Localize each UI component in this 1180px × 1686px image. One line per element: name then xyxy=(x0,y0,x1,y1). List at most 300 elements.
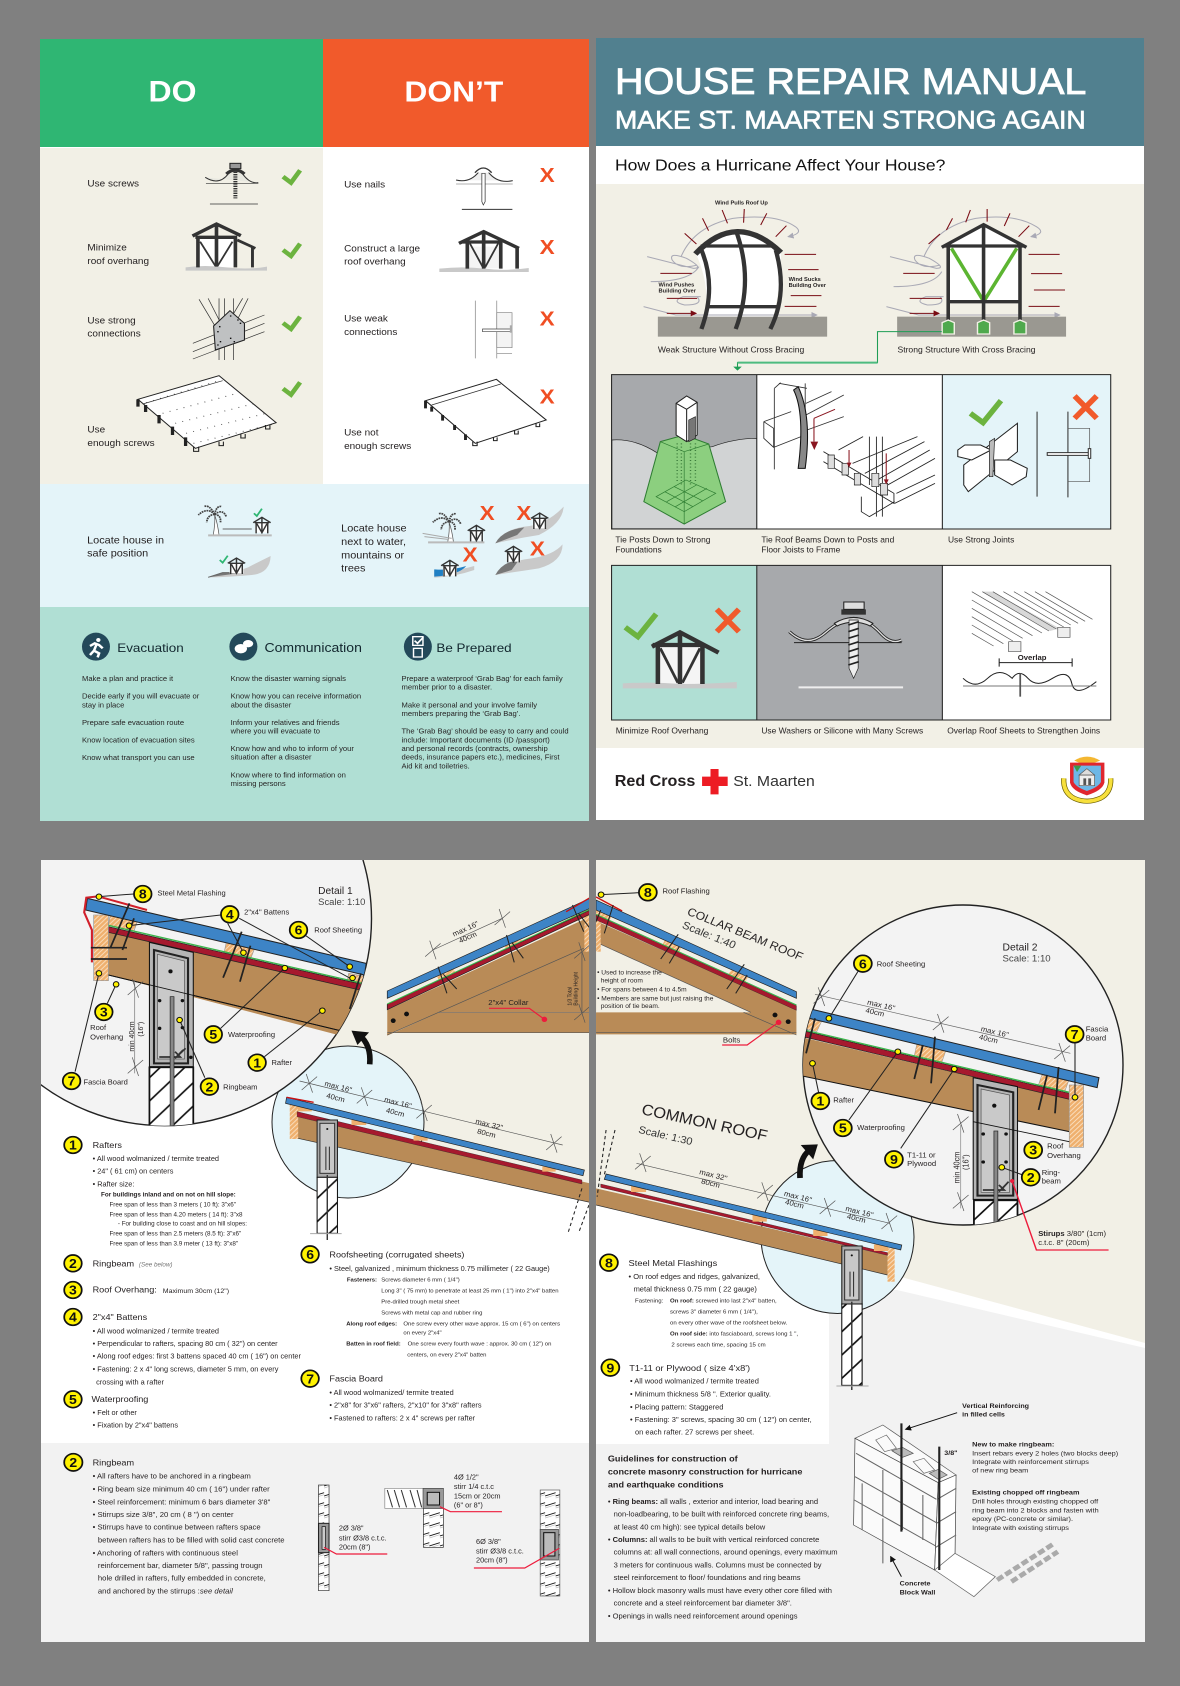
diagram: collar beam roof, left half xyxy=(387,898,591,1036)
icon: house on hill edge, unsafe: X xyxy=(530,537,545,560)
ringbeam text: between rafters has to be filled with solid cast concrete xyxy=(98,1536,285,1545)
detail 1 callouts: 2"x4" Battens xyxy=(244,908,290,917)
text: safe position xyxy=(87,536,164,560)
item 4 battens: • Along roof edges: first 3 battens spaced 40 cm ( 16") on center xyxy=(93,1353,302,1361)
item 7 fascia board: • Fastened to rafters: 2 x 4" screws per rafter xyxy=(329,1414,476,1422)
wall section B: 4Ø 1/2" xyxy=(454,1473,479,1481)
text: unsafe position: mountains or xyxy=(341,551,405,561)
labels: wall: 3/8" xyxy=(944,1450,958,1457)
text: existing ringbeam: Drill holes through existing chopped off xyxy=(972,1498,1098,1506)
list: communication: Know where to find information on xyxy=(231,771,346,779)
item 2 ringbeam: 2 xyxy=(69,1256,77,1271)
list: be prepared: Prepare a waterproof ‘Grab Bag’ for each family xyxy=(402,674,563,683)
do labels: Use strong xyxy=(87,316,136,326)
arrow: footing to detail xyxy=(733,332,942,371)
list: communication: missing persons xyxy=(231,779,286,788)
item 4 battens: • All wood wolmanized / termite treated xyxy=(93,1327,219,1335)
item 1 rafters: 1 xyxy=(69,1138,77,1153)
item 6 roofsheeting: Long 3" ( 75 mm) to penetrate at least 25 mm ( 1") into 2"x4" batten xyxy=(381,1288,559,1294)
captions: row one: Floor Joists to Frame xyxy=(761,546,841,555)
item 7 fascia board: • All wood wolmanized/ termite treated xyxy=(329,1389,454,1397)
ringbeam text xyxy=(64,1454,285,1595)
diagram: collar beam roof, right half xyxy=(596,884,796,1045)
detail 1 callouts: Roof Sheeting xyxy=(314,926,362,934)
heading: be prepared: Be Prepared xyxy=(436,641,512,655)
inset: common roof circle xyxy=(272,1046,424,1198)
diagram: common roof, left half: max 32" xyxy=(474,1117,504,1132)
diagram: common roof, right half: 80cm xyxy=(700,1177,721,1190)
item 8 steel metal flashings: metal thickness 0.75 mm ( 22 gauge) xyxy=(634,1285,757,1294)
item 1 rafters: For buildings inland and on not on hill slope: xyxy=(101,1191,236,1198)
do labels: Use xyxy=(87,425,105,436)
detail 2 callouts: c.t.c. 8" (20cm) xyxy=(1038,1238,1089,1247)
icons: green checks xyxy=(283,170,300,395)
detail 2 callouts: Rafter xyxy=(833,1096,855,1104)
captions: row one xyxy=(615,536,1014,555)
ringbeam text: • All rafters have to be anchored in a ringbeam xyxy=(93,1472,251,1481)
item 1 rafters: Free span of less than 3 meters ( 10 ft): 3"x6" xyxy=(109,1201,236,1208)
label: vertical reinforcing: Vertical Reinforcing xyxy=(962,1403,1029,1410)
panel: detail page left xyxy=(41,860,589,1642)
wall section C xyxy=(474,1490,560,1596)
item 4 battens: • Perpendicular to rafters, spacing 80 cm ( 32") on center xyxy=(93,1340,278,1348)
item 5 waterproofing: 5 xyxy=(69,1392,77,1407)
captions: row one: Tie Roof Beams Down to Posts and xyxy=(761,536,895,545)
do labels: roof overhang xyxy=(87,256,149,267)
item 2 ringbeam: Ringbeam xyxy=(93,1259,134,1269)
detail 1 callouts: min 40cm xyxy=(128,1021,136,1052)
list: be prepared: Aid kit and toiletries. xyxy=(402,762,470,770)
hurricane diagrams xyxy=(644,200,1066,371)
item 1 rafters: Free span of less than 2.5 meters (8.5 ft): 3"x6" xyxy=(109,1231,241,1238)
detail 2 callouts: 9 xyxy=(890,1151,898,1167)
beige background xyxy=(327,860,589,1183)
detail 1 callouts: Detail 1 xyxy=(318,886,353,897)
detail 1 callouts: Fascia Board xyxy=(83,1078,128,1086)
labels: wall: Concrete xyxy=(900,1581,931,1588)
don't labels: connections xyxy=(344,327,398,338)
guidelines list: steel reinforcement to floor/ foundations and ring beams xyxy=(614,1573,801,1582)
wall section B: stirr 1/4 c.t.c xyxy=(454,1483,494,1491)
icon: communication bubbles xyxy=(229,633,257,661)
item 2 ringbeam xyxy=(64,1255,173,1272)
label: vertical reinforcing: in filled cells xyxy=(962,1412,1005,1419)
diagram: common roof, right half: max 32" xyxy=(698,1167,729,1183)
guidelines list: columns at: all wall connections, around openings, every maximum xyxy=(614,1548,838,1557)
item 6 roofsheeting: One screw every other wave approx. 15 cm ( 6") on centers xyxy=(403,1321,560,1327)
item 6 roofsheeting: One screw every fourth wave : approx. 30 cm ( 12") on xyxy=(408,1341,551,1347)
detail grid xyxy=(612,375,1111,801)
item 8 steel metal flashings: 2 screws each time, spacing 15 cm xyxy=(671,1343,766,1349)
icon: house on hill edge, unsafe xyxy=(495,537,563,575)
item 8 steel metal flashings: On roof side: into fasciaboard, screws long 1 ", xyxy=(670,1332,798,1338)
detail 2 callouts: Ring- xyxy=(1042,1168,1061,1177)
arrow: common roof to detail 2 xyxy=(800,1144,818,1178)
ringbeam text: reinforcement bar, diameter 5/8", passing trougn xyxy=(98,1561,263,1570)
text: unsafe position: trees xyxy=(341,564,365,575)
diagram: common roof, left half: max 16" xyxy=(383,1095,413,1111)
do column background xyxy=(40,148,323,484)
item 8 steel metal flashings: on every other wave of the roofsheet below. xyxy=(670,1321,788,1327)
diagram: collar beam roof, right half: Bolts xyxy=(723,1036,740,1045)
do labels xyxy=(87,179,155,449)
item 6 roofsheeting: Screws diameter 6 mm ( 1/4") xyxy=(381,1278,460,1284)
don't labels: Construct a large xyxy=(344,244,420,254)
notes: collar beam: position of tie beam. xyxy=(601,1003,660,1010)
icon: strong connection plate xyxy=(193,298,264,360)
item 5 waterproofing: • Felt or other xyxy=(93,1409,137,1417)
section: locate house xyxy=(40,484,589,607)
item 7 fascia board: Fascia Board xyxy=(329,1374,383,1384)
text: existing ringbeam: ring beam into 2 blocks and fasten with xyxy=(972,1507,1099,1514)
panel: overlap roof sheets xyxy=(942,565,1111,720)
guidelines list: non-loadbearing, to be built with reinforced concrete ring beams, xyxy=(614,1510,829,1519)
diagram: collar beam roof, left half: max 16" xyxy=(451,919,480,938)
item 5 waterproofing: • Fixation by 2"x4" battens xyxy=(93,1422,178,1430)
notes: collar beam xyxy=(597,970,714,1010)
text: new ringbeam: of new ring beam xyxy=(972,1467,1028,1475)
text: unsafe position xyxy=(341,524,407,575)
ringbeam text: • Stirrups have to continue between rafters space xyxy=(93,1523,261,1532)
guidelines heading: concrete masonry construction for hurricane xyxy=(608,1467,803,1477)
icons: red x marks xyxy=(540,163,555,408)
list: communication xyxy=(230,674,361,788)
grid frame row two xyxy=(612,565,1111,720)
item 1 rafters: Rafters xyxy=(93,1140,123,1150)
icon: nail xyxy=(456,168,513,209)
detail 2 callouts: max 16" xyxy=(866,998,896,1013)
item 6 roofsheeting: • Steel, galvanized , minimum thickness 0.75 millimeter ( 22 Gauge) xyxy=(329,1265,550,1273)
diagram: common roof, left half: 80cm xyxy=(476,1127,497,1140)
labels: wall: Block Wall xyxy=(900,1590,935,1596)
specification list: left column xyxy=(64,1137,560,1430)
icon: roof panel with enough screws xyxy=(138,376,276,451)
detail 2 callouts: Detail 2 xyxy=(1002,943,1038,953)
captions: row two: Minimize Roof Overhang xyxy=(616,727,709,735)
detail 2 callouts: 6 xyxy=(859,956,867,971)
item 3 roof overhang xyxy=(64,1282,229,1298)
wall section A xyxy=(319,1485,387,1591)
list: communication: Inform your relatives and friends xyxy=(231,718,340,727)
item 1 rafters: • 24" ( 61 cm) on centers xyxy=(93,1168,174,1176)
detail 1 callouts: Waterproofing xyxy=(228,1030,275,1039)
icon: safe distance from palm xyxy=(198,506,272,535)
heading: DO: DO xyxy=(149,75,196,108)
detail 1 callouts: Roof xyxy=(90,1023,107,1032)
icon: house below hill, unsafe xyxy=(495,501,564,543)
detail 2 callouts: 5 xyxy=(839,1120,847,1136)
title banner xyxy=(596,38,1144,146)
detail 1 callouts xyxy=(63,886,365,1095)
detail 1 callouts: 1 xyxy=(253,1056,261,1070)
diagram: weak structure: Wind Pushes xyxy=(659,283,694,289)
panel: tie roof beams xyxy=(757,375,942,529)
diagram: collar beam roof, left half: Building Height xyxy=(573,972,579,1006)
item 1 rafters: Free span of less than 4.20 meters ( 14 ft): 3"x8 xyxy=(109,1211,243,1218)
do labels: Use screws xyxy=(87,179,139,190)
heading: DON'T: DON’T xyxy=(404,77,504,108)
icons: red x marks: X xyxy=(540,235,555,259)
logo: Red Cross St. Maarten: St. Maarten xyxy=(733,773,815,790)
item 8 steel metal flashings xyxy=(600,1254,798,1349)
detail 2 callouts xyxy=(810,943,1109,1250)
detail 1 callouts: Scale: 1:10 xyxy=(318,897,365,907)
list: be prepared: member prior to a disaster. xyxy=(402,683,492,692)
detail 1 circle xyxy=(41,860,372,1126)
item 9 plywood: • Fastening: 3" screws, spacing 30 cm ( 12") on center, xyxy=(630,1415,812,1424)
item 9 plywood: • All wood wolmanized / termite treated xyxy=(630,1377,759,1386)
detail 1 callouts: Steel Metal Flashing xyxy=(158,889,226,898)
title: common roof: Scale: 1:30 xyxy=(637,1124,694,1148)
title: collar beam roof: COLLAR BEAM ROOF xyxy=(685,905,805,963)
detail 1 callouts: 5 xyxy=(209,1027,218,1042)
guidelines list: • Ring beams: all walls , exterior and interior, load bearing and xyxy=(608,1497,818,1506)
item 8 steel metal flashings: On roof: screwed into last 2"x4" batten, xyxy=(670,1299,777,1305)
item 1 rafters xyxy=(64,1137,247,1248)
ringbeam section xyxy=(64,1454,560,1596)
icon: large overhang house xyxy=(439,232,529,272)
do labels: connections xyxy=(87,329,141,340)
don't labels xyxy=(344,180,420,452)
list: be prepared: and personal records (contracts, ownership xyxy=(402,744,548,753)
item 3 roof overhang: Maximum 30cm (12") xyxy=(163,1288,229,1295)
item 1 rafters: Free span of less than 3.9 meter ( 13 ft): 3"x8" xyxy=(109,1241,238,1248)
item 1 rafters: • Rafter size: xyxy=(93,1180,134,1188)
item 5 waterproofing: Waterproofing xyxy=(92,1394,148,1404)
icon: house in water, unsafe xyxy=(434,543,478,578)
list: communication: situation after a disaster xyxy=(231,753,312,762)
locate house section xyxy=(87,501,564,578)
list: evacuation: Know location of evacuation sites xyxy=(82,736,195,744)
diagram: common roof, left half: max 16" xyxy=(324,1079,353,1095)
icon: minimal overhang house xyxy=(186,224,267,271)
item 9 plywood xyxy=(601,1359,812,1437)
item 4 battens: crossing with a rafter xyxy=(96,1378,165,1386)
text: unsafe position: Locate house xyxy=(341,524,407,535)
detail 1 callouts: Ringbeam xyxy=(223,1083,257,1091)
diagram: common roof, right half: max 16" xyxy=(844,1204,875,1219)
don't labels: Use nails xyxy=(344,180,385,190)
guidelines heading xyxy=(608,1454,803,1489)
item 7 fascia board: • 2"x8" for 3"x6" rafters, 2"x10" for 3"x8" rafters xyxy=(329,1402,482,1410)
preparedness section xyxy=(82,633,569,788)
icon: house near palm, unsafe: X xyxy=(480,501,495,525)
don't labels: Use not xyxy=(344,428,379,439)
detail 1 callouts: 6 xyxy=(295,923,303,938)
text: new ringbeam xyxy=(972,1441,1118,1475)
item 8 steel metal flashings: Fastening: xyxy=(635,1299,664,1305)
list: be prepared: Make it personal and your involve family xyxy=(402,701,537,709)
wall section A: 20cm (8") xyxy=(339,1543,370,1551)
wall section C: 6Ø 3/8" xyxy=(476,1538,501,1546)
item 1 rafters: - For building close to coast and on hill slopes: xyxy=(118,1221,247,1228)
diagram: weak structure: Wind Sucks xyxy=(789,277,821,283)
item 8 steel metal flashings: screws 3" diameter 6 mm ( 1/4"), xyxy=(670,1310,758,1316)
wall section C: stirr Ø3/8 c.t.c. xyxy=(476,1548,524,1556)
text: existing ringbeam: epoxy (PC-concrete or similar). xyxy=(972,1515,1073,1523)
icon: house in water, unsafe: X xyxy=(463,543,478,566)
item 9 plywood: T1-11 or Plywood ( size 4'x8') xyxy=(629,1363,750,1373)
title, subtitle and question: How Does a Hurricane Affect Your House? xyxy=(615,157,945,175)
text: safe position: safe position xyxy=(87,549,148,560)
title, subtitle and question: HOUSE REPAIR MANUAL xyxy=(615,61,1086,103)
diagram: strong structure xyxy=(886,209,1066,337)
wall section C: 20cm (8") xyxy=(476,1557,508,1565)
ringbeam section background xyxy=(41,1443,589,1642)
detail 1 callouts: 8 xyxy=(139,887,147,902)
guidelines heading: Guidelines for construction of xyxy=(608,1454,738,1464)
guidelines list: at least 40 cm high): see typical details below xyxy=(614,1523,766,1531)
text: new ringbeam: New to make ringbeam: xyxy=(972,1441,1054,1449)
detail 2 circle xyxy=(801,905,1123,1250)
icons: red x marks: X xyxy=(540,307,555,330)
do labels: enough screws xyxy=(87,438,155,449)
ringbeam text: Ringbeam xyxy=(93,1458,134,1468)
notes: collar beam: • For spans between 4 to 4.5m xyxy=(597,987,687,993)
ringbeam text: 2 xyxy=(69,1455,78,1470)
labels: wall xyxy=(891,1450,958,1596)
header: do xyxy=(40,39,323,147)
label: vertical reinforcing xyxy=(906,1403,1029,1429)
don't labels: roof overhang xyxy=(344,257,406,268)
detail 2 callouts: Plywood xyxy=(907,1159,936,1168)
guidelines heading: and earthquake conditions xyxy=(608,1480,724,1489)
notes: collar beam: height of room xyxy=(601,978,643,984)
detail 2 callouts: Roof xyxy=(1047,1142,1064,1151)
item 8 steel metal flashings: • On roof edges and ridges, galvanized, xyxy=(629,1272,760,1281)
inset: common roof circle xyxy=(761,1160,914,1314)
icon: house near palm, unsafe xyxy=(423,501,495,542)
detail 2 callouts: max 16" xyxy=(980,1024,1010,1039)
list: evacuation: stay in place xyxy=(82,701,124,709)
panel: overlap roof sheets: Overlap xyxy=(1018,653,1047,662)
detail 2 callouts: Waterproofing xyxy=(857,1123,905,1132)
list: evacuation xyxy=(82,674,200,762)
do and don't comparison items xyxy=(87,75,555,452)
guidelines list: • Hollow block masonry walls must have every other core filled with xyxy=(608,1586,832,1595)
text: new ringbeam: Insert rebars every 2 holes (two blocks deep) xyxy=(972,1450,1118,1457)
diagram: collar beam roof, left half: 2"x4" Collar xyxy=(488,998,529,1007)
diagram: weak structure xyxy=(644,200,827,337)
light gray background xyxy=(596,1290,1145,1642)
don't labels: Use weak xyxy=(344,314,388,325)
detail 2 callouts: (16") xyxy=(961,1154,971,1170)
hurricane section background xyxy=(596,184,1144,748)
item 6 roofsheeting: Pre-drilled trough metal sheet xyxy=(381,1299,460,1305)
detail 1 callouts: Rafter xyxy=(272,1058,293,1067)
guidelines xyxy=(608,1423,1118,1620)
logo: coat of arms xyxy=(1064,757,1111,801)
diagram: common roof, right half: 40cm xyxy=(784,1197,805,1210)
item 7 fascia board xyxy=(301,1370,482,1422)
wall section A: stirr Ø3/8 c.t.c. xyxy=(339,1535,387,1543)
detail 2 callouts: Scale: 1:10 xyxy=(1002,954,1051,964)
detail 1 callouts: 7 xyxy=(68,1074,75,1089)
item 2 ringbeam: (See below) xyxy=(139,1261,173,1268)
panel: strong joints xyxy=(942,375,1111,529)
logo: Red Cross St. Maarten: Red Cross xyxy=(615,773,696,790)
caption: weak structure: Weak Structure Without Cross Bracing xyxy=(658,345,805,355)
panel: do and don't xyxy=(40,39,589,821)
detail 2 callouts: Board xyxy=(1086,1034,1106,1042)
guidelines list xyxy=(608,1497,838,1620)
item 8 steel metal flashings: Steel Metal Flashings xyxy=(629,1258,718,1268)
ringbeam text: • Stirrups size 3/8", 20 cm ( 8 ") on center xyxy=(93,1510,234,1519)
ringbeam text: hole drilled in rafters, fully embedded in concrete, xyxy=(98,1574,266,1583)
item 9 plywood: • Placing pattern: Staggered xyxy=(630,1403,723,1411)
item 1 rafters: • All wood wolmanized / termite treated xyxy=(93,1155,219,1163)
ringbeam text: • Steel reinforcement: minimum 6 bars diameter 3'8" xyxy=(93,1498,271,1506)
icon: house below hill, unsafe: X xyxy=(516,501,532,525)
list: be prepared: include: Important documents (ID /passport) xyxy=(402,736,550,744)
grid frame row one xyxy=(612,375,1111,529)
logo: Red Cross St. Maarten xyxy=(615,769,815,794)
detail 1 callouts: (16") xyxy=(137,1022,145,1037)
drawing: concrete block wall xyxy=(854,1423,1058,1597)
text: existing ringbeam: Integrate with existing stirrups xyxy=(972,1524,1069,1532)
text: safe position: Locate house in xyxy=(87,536,164,546)
item 6 roofsheeting: Along roof edges: xyxy=(346,1321,397,1327)
captions: row two: Overlap Roof Sheets to Strengthen Joins xyxy=(947,727,1100,735)
diagram: collar beam roof, left half: 1/3 Total xyxy=(567,987,573,1006)
list: evacuation: Make a plan and practice it xyxy=(82,674,173,683)
detail 2 callouts: Overhang xyxy=(1047,1151,1081,1160)
item 6 roofsheeting: centers, on every 2"x4" batten xyxy=(407,1352,486,1358)
text: unsafe position: next to water, xyxy=(341,537,406,548)
item 6 roofsheeting: Roofsheeting (corrugated sheets) xyxy=(329,1250,464,1260)
wall section A: 2Ø 3/8" xyxy=(339,1525,364,1533)
detail 2 callouts: 2 xyxy=(1027,1169,1035,1185)
diagram: common roof, left half: 40cm xyxy=(385,1106,406,1119)
detail 2 callouts: 1 xyxy=(816,1093,825,1109)
icons: red x marks: X xyxy=(540,384,555,408)
item 6 roofsheeting: 6 xyxy=(306,1247,314,1262)
list: be prepared: deeds, insurance papers etc.), medicines, First xyxy=(402,753,560,762)
diagram: common roof, right half xyxy=(596,1130,902,1390)
list: communication: about the disaster xyxy=(231,701,292,709)
notes: collar beam: • Used to increase the xyxy=(597,970,662,976)
detail 2 callouts: 40cm xyxy=(978,1032,999,1045)
heading: evacuation: Evacuation xyxy=(117,641,184,655)
list: be prepared: members preparing the ‘Grab Bag’. xyxy=(402,709,521,718)
icon: safe hill position xyxy=(208,556,271,577)
title, subtitle and question: MAKE ST. MAARTEN STRONG AGAIN xyxy=(615,106,1086,134)
list: communication: Know how and who to inform of your xyxy=(231,744,355,753)
captions: row two xyxy=(616,727,1100,735)
panel: detail page right xyxy=(596,860,1145,1642)
detail 2 callouts: 7 xyxy=(1071,1026,1079,1042)
detail 2 callouts: 3 xyxy=(1029,1142,1038,1158)
ringbeam text: • Ring beam size minimum 40 cm ( 16") under rafter xyxy=(93,1485,270,1493)
captions: row one: Foundations xyxy=(615,546,662,555)
title: collar beam roof: Scale: 1:40 xyxy=(680,920,738,952)
panel: washers and screws xyxy=(757,565,942,720)
detail 2 callouts: 40cm xyxy=(864,1006,885,1019)
title, subtitle and question xyxy=(615,61,1086,175)
item 5 waterproofing xyxy=(64,1391,178,1430)
panel: house repair manual cover xyxy=(596,38,1144,820)
detail 1 callouts: Overhang xyxy=(90,1033,123,1041)
item 6 roofsheeting xyxy=(301,1246,560,1358)
detail 1 callouts: 3 xyxy=(100,1005,108,1020)
list: be prepared xyxy=(402,674,569,770)
captions: row two: Use Washers or Silicone with Many Screws xyxy=(761,727,923,735)
title: common roof: COMMON ROOF xyxy=(640,1102,769,1145)
item 6 roofsheeting: Fasteners: xyxy=(347,1278,377,1284)
list: be prepared: The ‘Grab Bag’ should be easy to carry and could xyxy=(402,727,569,736)
guidelines list: • Columns: all walls to be built with vertical reinforced concrete xyxy=(608,1535,819,1544)
panel: minimize roof overhang xyxy=(612,565,757,720)
